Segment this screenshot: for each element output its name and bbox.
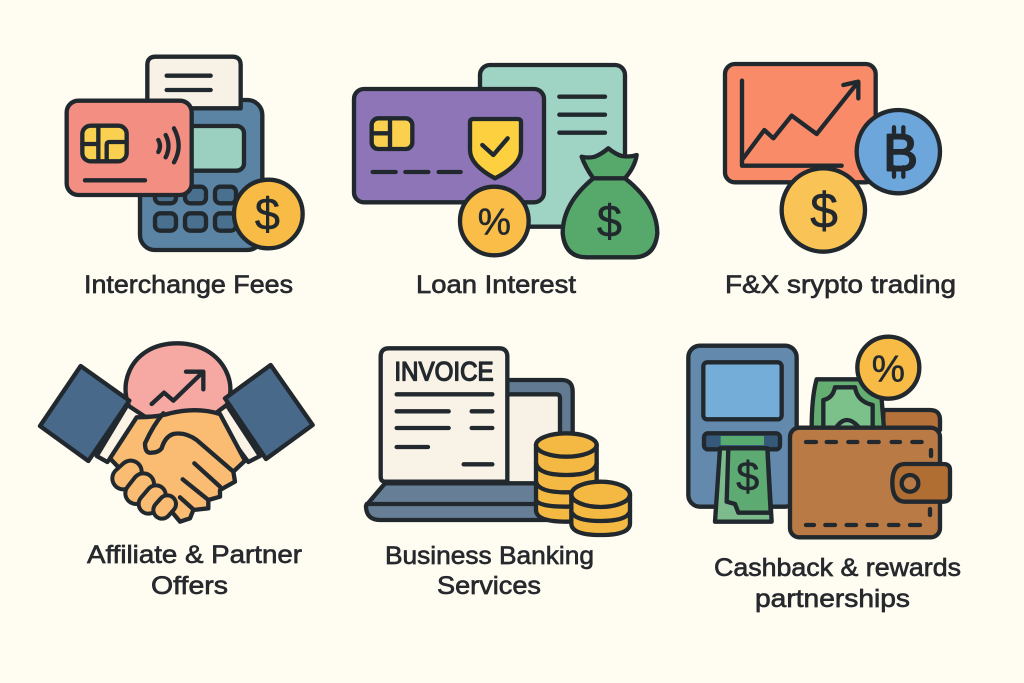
icon: ATM, cash, wallet and percent coin: % <box>872 348 905 390</box>
label: interchange fees: Interchange Fees <box>84 271 293 299</box>
icon: card, document, percent coin and money bag: $ <box>597 196 622 247</box>
panel: loan interest <box>354 65 657 299</box>
label: cashback and rewards partnerships: Cashback & rewards <box>714 554 961 582</box>
label: crypto trading: F&X srypto trading <box>725 271 956 299</box>
label: cashback and rewards partnerships: partnerships <box>755 585 910 613</box>
icon: invoice, laptop and coin stacks: INVOICE <box>394 356 494 386</box>
panel: affiliate and partner offers <box>40 343 313 600</box>
panel: business banking services <box>366 348 630 600</box>
icon: ATM, cash, wallet and percent coin: $ <box>736 453 759 500</box>
panel: cashback and rewards partnerships <box>688 337 961 613</box>
panel: interchange fees <box>67 57 303 299</box>
icon: ATM, cash, wallet and percent coin <box>688 337 950 537</box>
label: business banking services: Services <box>437 572 541 600</box>
label: loan interest: Loan Interest <box>416 271 576 299</box>
icon: payment terminal with card and coin: $ <box>255 188 280 239</box>
panel: crypto trading <box>725 64 956 299</box>
icon detail: fingers <box>123 472 167 510</box>
icon: invoice, laptop and coin stacks <box>366 348 630 535</box>
label: business banking services: Business Banking <box>385 542 594 570</box>
icon: handshake with growth bubble <box>40 343 313 522</box>
label: business banking services <box>385 542 594 600</box>
label: affiliate and partner offers <box>87 541 302 600</box>
label: affiliate and partner offers: Offers <box>151 572 228 600</box>
label: cashback and rewards partnerships <box>714 554 961 613</box>
label: affiliate and partner offers: Affiliate & Partner <box>87 541 302 569</box>
icon: rising chart with bitcoin and dollar coins: B <box>883 124 918 182</box>
icon: rising chart with bitcoin and dollar coins <box>725 64 940 252</box>
icon: payment terminal with card and coin <box>67 57 303 250</box>
icon: card, document, percent coin and money bag <box>354 65 657 257</box>
icon: card, document, percent coin and money bag: % <box>478 200 511 242</box>
icon: rising chart with bitcoin and dollar coins: $ <box>810 183 838 239</box>
